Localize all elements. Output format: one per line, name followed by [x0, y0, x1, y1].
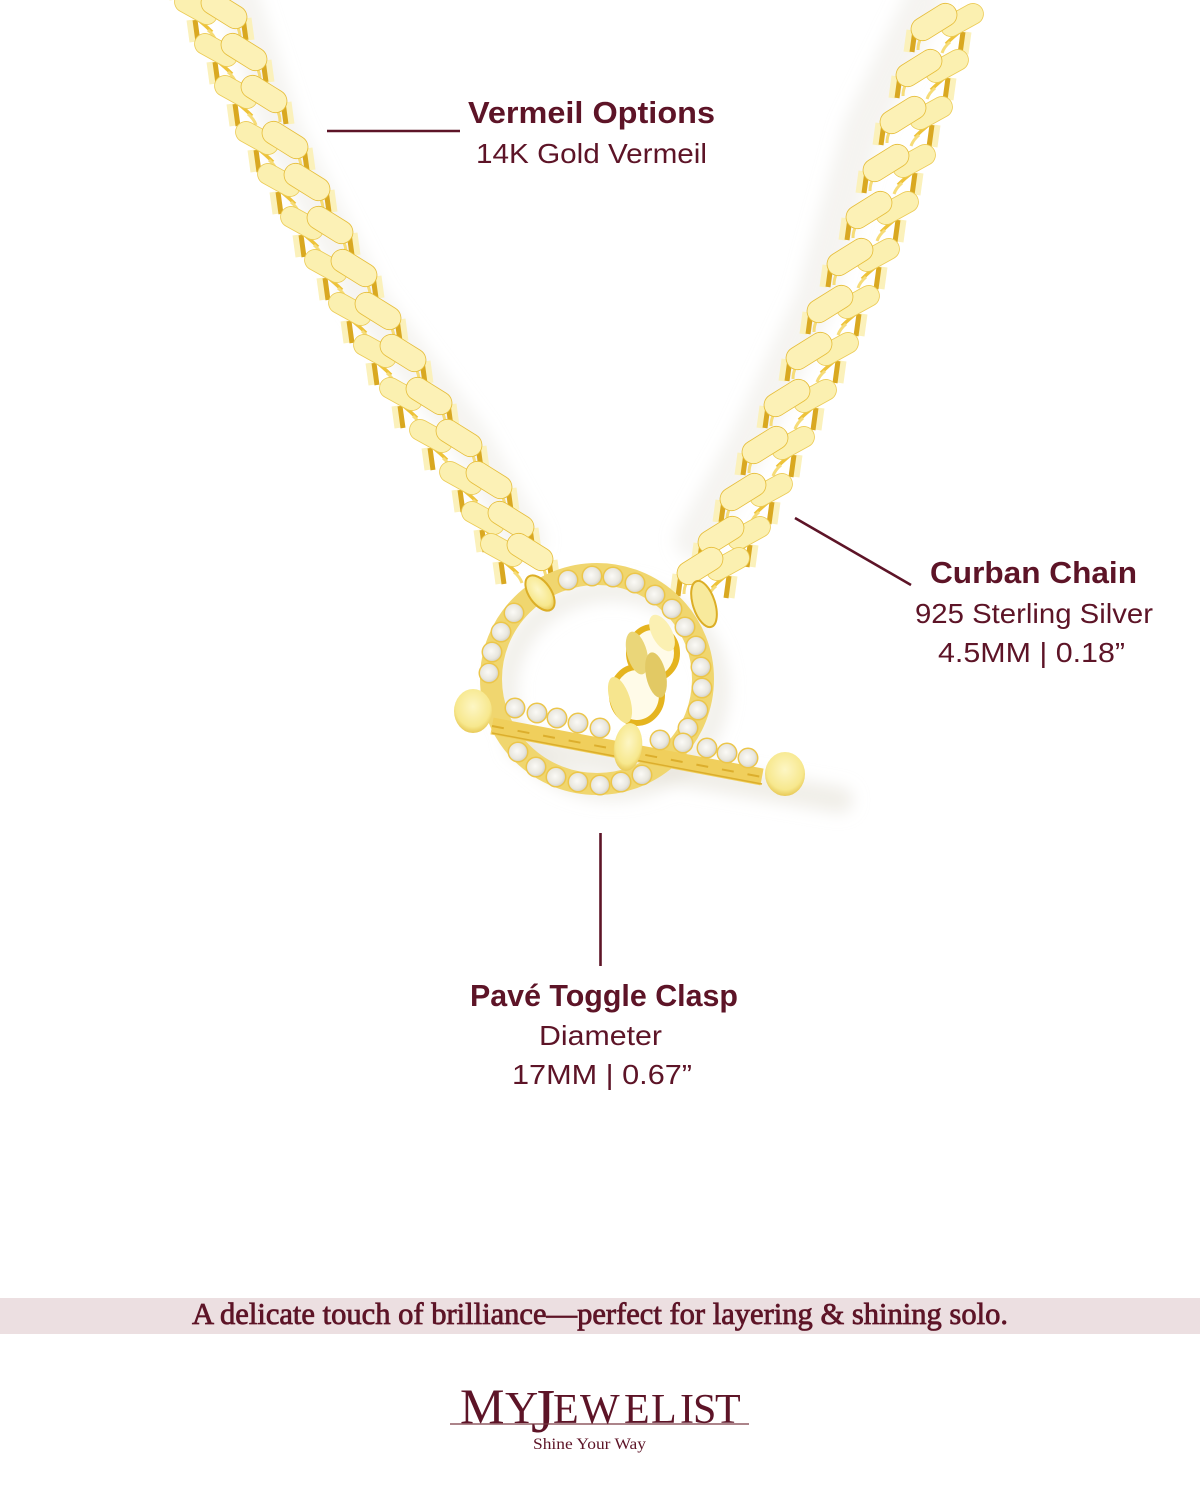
necklace left chain — [151, 0, 557, 584]
heading: Curban Chain — [930, 555, 1137, 590]
tagline band — [0, 1296, 1200, 1334]
wordmark: E — [553, 1387, 579, 1433]
center knob — [611, 721, 645, 773]
wordmark: S — [693, 1387, 716, 1433]
leader line — [795, 518, 911, 585]
callout: vermeil options — [327, 95, 715, 169]
wordmark: Y — [505, 1382, 538, 1433]
tagline text: A delicate touch of brilliance—perfect for layering & shining solo. — [192, 1296, 1008, 1331]
size: 17MM | 0.67” — [512, 1059, 692, 1090]
ring gems — [478, 566, 712, 796]
wordmark: L — [651, 1387, 677, 1433]
callout: pavé toggle clasp — [470, 833, 738, 1090]
label: Diameter — [539, 1020, 662, 1051]
material: 925 Sterling Silver — [915, 598, 1153, 629]
heading: Pavé Toggle Clasp — [470, 978, 738, 1013]
wordmark: E — [624, 1387, 650, 1433]
pavé toggle clasp — [454, 566, 805, 796]
wordmark: J — [531, 1378, 555, 1446]
toggle bar — [492, 726, 762, 784]
heading: Vermeil Options — [468, 95, 715, 130]
wordmark: T — [715, 1387, 741, 1433]
wordmark: M — [460, 1378, 504, 1434]
necklace right chain — [673, 0, 987, 598]
leader line — [599, 833, 602, 966]
bar gems — [504, 698, 758, 768]
callout: curban chain — [795, 518, 1153, 668]
wordmark: I — [680, 1387, 694, 1433]
chain shadows — [240, 0, 925, 800]
clasp ring — [491, 574, 703, 784]
detail: 14K Gold Vermeil — [476, 138, 707, 169]
inner chain links — [603, 611, 680, 726]
ring connectors — [520, 570, 722, 630]
logo rule — [450, 1423, 749, 1425]
slogan: Shine Your Way — [533, 1436, 646, 1453]
left ball end — [454, 689, 492, 733]
logo — [450, 1378, 749, 1453]
wordmark: W — [580, 1387, 620, 1433]
band — [0, 1298, 1200, 1334]
width: 4.5MM | 0.18” — [938, 637, 1125, 668]
leader line — [327, 130, 460, 132]
right ball end — [765, 752, 805, 796]
